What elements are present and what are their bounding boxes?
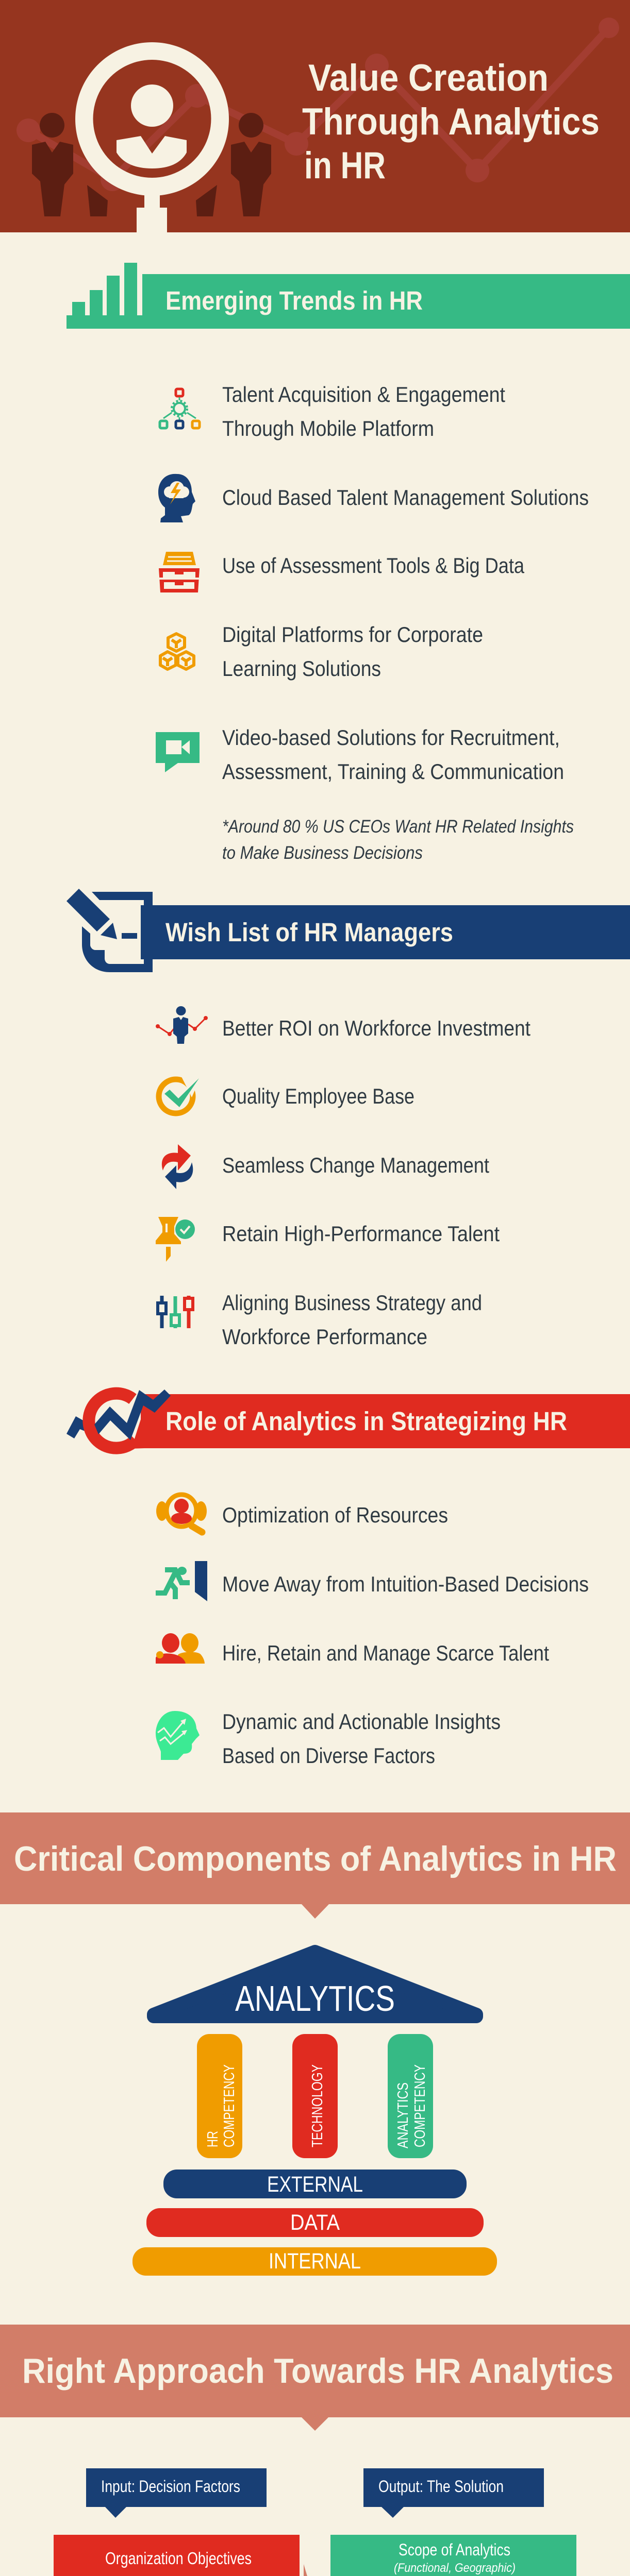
title: Through Analytics (302, 101, 600, 143)
icon: side people (32, 113, 271, 216)
heading: Wish List of HR Managers (165, 918, 453, 947)
pediment (154, 1952, 476, 2019)
heading: Role of Analytics in Strategizing HR (165, 1406, 567, 1436)
icon: network gear (160, 389, 200, 428)
icon: magnifier with person (75, 42, 229, 232)
text: dynamic (222, 1709, 501, 1768)
base: data (146, 2208, 484, 2237)
base: external (163, 2170, 467, 2198)
callout: input (86, 2468, 267, 2518)
text: talent acquisition: Talent Acquisition & Engagement (222, 382, 505, 406)
note: CEO insights: to Make Business Decisions (222, 843, 423, 863)
icon: target with zigzag (67, 1389, 171, 1449)
icon: bar chart (72, 263, 137, 315)
pillar: technology (292, 2034, 338, 2158)
pillar: analytics competency (388, 2034, 433, 2158)
text: dynamic: Dynamic and Actionable Insights (222, 1709, 501, 1734)
pillar: analytics competency: COMPETENCY (412, 2064, 428, 2147)
text: change management: Seamless Change Management (222, 1153, 489, 1177)
text: assessment tools: Use of Assessment Tools & Big Data (222, 553, 525, 578)
text: aligning (222, 1291, 482, 1349)
arrow (304, 2564, 320, 2576)
panel: wish list heading (67, 889, 630, 972)
banner: critical components (0, 1812, 630, 1919)
text: digital platforms: Digital Platforms for Corporate (222, 622, 483, 647)
text: talent acquisition: Through Mobile Platform (222, 416, 434, 440)
text: video based: Assessment, Training & Communication (222, 759, 564, 784)
base: data: DATA (290, 2210, 340, 2235)
callout: input: Input: Decision Factors (101, 2477, 240, 2496)
box: scope of analytics: Scope of Analytics (399, 2540, 510, 2559)
text: optimization: Optimization of Resources (222, 1503, 448, 1527)
title: Value Creation (308, 57, 549, 99)
icon: two people (156, 1633, 205, 1664)
pillar: HR competency: HR (205, 2131, 221, 2147)
base: internal: INTERNAL (269, 2249, 361, 2274)
chart line backdrop (16, 18, 619, 191)
text: talent acquisition (222, 382, 505, 440)
note: CEO insights: *Around 80 % US CEOs Want HR Related Insights (222, 817, 574, 837)
diagram: analytics temple (132, 1952, 497, 2276)
header banner (0, 0, 630, 232)
title (302, 57, 600, 187)
panel: role of analytics heading (67, 1389, 630, 1449)
icon: runner and door (156, 1561, 207, 1601)
icon: head with cloud (158, 474, 195, 522)
note: CEO insights (222, 817, 574, 863)
text: digital platforms (222, 622, 483, 681)
title: in HR (304, 145, 386, 187)
base: external: EXTERNAL (267, 2172, 363, 2197)
text: video based: Video-based Solutions for Recruitment, (222, 725, 560, 750)
icon: check ring (159, 1076, 201, 1113)
box: organization objectives: Organization Objectives (105, 2549, 252, 2568)
pillar: analytics competency: ANALYTICS (395, 2082, 411, 2148)
icon: pencil and paper (67, 889, 153, 972)
text: cloud based: Cloud Based Talent Management Solutions (222, 485, 589, 510)
heading: Emerging Trends in HR (165, 286, 423, 315)
pillar: technology: TECHNOLOGY (309, 2064, 326, 2147)
panel: emerging trends list (156, 382, 589, 863)
icon: file drawers (159, 552, 200, 592)
text: video based (222, 725, 564, 784)
icon: cubes (160, 634, 194, 669)
icon: change arrows (162, 1144, 193, 1189)
text: quality: Quality Employee Base (222, 1084, 415, 1108)
box: scope of analytics (330, 2535, 576, 2576)
icon: pin and check (156, 1217, 195, 1262)
text: aligning: Workforce Performance (222, 1325, 427, 1349)
text: better ROI: Better ROI on Workforce Investment (222, 1016, 530, 1040)
text: intuition: Move Away from Intuition-Based Decisions (222, 1572, 589, 1596)
box: scope of analytics: (Functional, Geographic) (394, 2561, 516, 2575)
icon: magnifier person (156, 1495, 207, 1532)
callout: output: Output: The Solution (378, 2477, 504, 2496)
panel: role of analytics items (156, 1495, 589, 1768)
text: retain: Retain High-Performance Talent (222, 1222, 500, 1246)
icon: head with arrows (156, 1711, 200, 1760)
pillar: HR competency: COMPETENCY (221, 2064, 238, 2147)
panel: emerging trends heading (67, 263, 630, 329)
box: organization objectives (54, 2535, 300, 2576)
text: aligning: Aligning Business Strategy and (222, 1291, 482, 1315)
text: dynamic: Based on Diverse Factors (222, 1743, 435, 1768)
text: digital platforms: Learning Solutions (222, 656, 381, 681)
banner: right approach (0, 2325, 630, 2431)
text: hire retain: Hire, Retain and Manage Scarce Talent (222, 1641, 549, 1665)
base: internal (132, 2247, 497, 2276)
pediment: ANALYTICS (235, 1978, 395, 2019)
callout: output (363, 2468, 544, 2518)
diagram: input output flow (54, 2468, 576, 2576)
pillar: HR competency (197, 2034, 242, 2158)
icon: man with trend (156, 1006, 208, 1044)
icon: sliders (158, 1296, 193, 1328)
icon: video chat (156, 732, 200, 772)
panel: wish list items (156, 1006, 530, 1349)
